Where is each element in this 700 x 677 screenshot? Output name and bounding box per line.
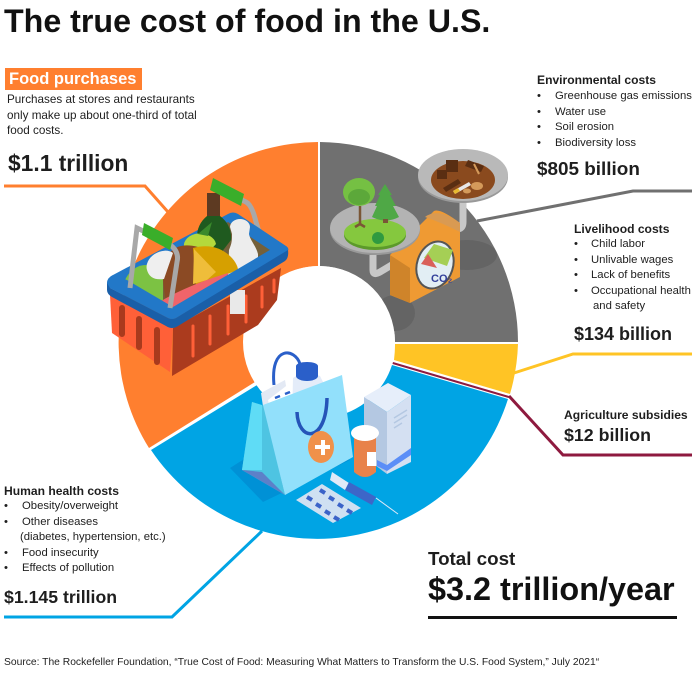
total underline (428, 616, 677, 619)
leader line: food purchases (4, 186, 168, 212)
panel: food purchases (5, 68, 197, 176)
leader line: human health costs (4, 531, 262, 617)
panel: total cost (428, 548, 675, 607)
value: agriculture subsidies: $12 billion (564, 425, 651, 445)
list: livelihood costs: • (574, 254, 578, 266)
icon: CO2 scale with tree and deforestation plates: CO₂ (431, 273, 452, 285)
list: livelihood costs: and safety (593, 300, 645, 312)
panel: livelihood costs (574, 222, 691, 344)
list: environmental costs: • (537, 136, 541, 148)
value: environmental costs: $805 billion (537, 159, 640, 180)
list: environmental costs: • (537, 121, 541, 133)
text: food purchases description: Purchases at stores and restaurants (7, 93, 195, 106)
donut segment: human health costs (151, 365, 508, 539)
list: livelihood costs: Lack of benefits (591, 269, 670, 281)
value: total cost: $3.2 trillion/year (428, 571, 675, 607)
icon: shopping basket (107, 178, 288, 376)
panel: human health costs (4, 484, 166, 607)
list: human health costs: Other diseases (22, 516, 98, 528)
list: human health costs (4, 500, 166, 574)
list: livelihood costs: Child labor (591, 238, 645, 250)
leader line: livelihood costs (514, 354, 692, 373)
list: livelihood costs (574, 238, 691, 312)
heading: environmental costs: Environmental costs (537, 73, 656, 87)
icon: CO2 scale with tree and deforestation plates (243, 149, 508, 418)
heading: agriculture subsidies: Agriculture subsidies (564, 408, 688, 422)
list: livelihood costs: • (574, 238, 578, 250)
icon: medical bag, medicine box, bottle and syringe (230, 353, 411, 523)
value: food purchases: $1.1 trillion (8, 150, 128, 176)
text: food purchases description: food costs. (7, 124, 64, 137)
value: human health costs: $1.145 trillion (4, 587, 117, 607)
panel: agriculture subsidies (564, 408, 688, 445)
list: environmental costs: • (537, 106, 541, 118)
heading: total cost: Total cost (428, 548, 515, 569)
list: livelihood costs: Occupational health (591, 284, 691, 296)
source note: Source: The Rockefeller Foundation, “True Cost of Food: Measuring What Matters to Transform the U.S. Food System,” July 2021“ (4, 657, 599, 668)
donut segment: livelihood costs (394, 344, 518, 394)
list: livelihood costs: Unlivable wages (591, 254, 673, 266)
donut segment: food purchases (119, 142, 318, 448)
heading: human health costs: Human health costs (4, 484, 119, 498)
list: environmental costs: Water use (555, 106, 606, 118)
value: livelihood costs: $134 billion (574, 324, 672, 344)
leader line: environmental costs (477, 191, 692, 221)
list: environmental costs: Greenhouse gas emissions (555, 90, 692, 102)
list: environmental costs: Biodiversity loss (555, 136, 636, 148)
list: environmental costs: Soil erosion (555, 121, 614, 133)
list: human health costs: • (4, 562, 8, 574)
list: livelihood costs: • (574, 284, 578, 296)
list: human health costs: Effects of pollution (22, 562, 114, 574)
list: human health costs: • (4, 516, 8, 528)
leader line: agriculture subsidies (509, 396, 692, 455)
list: livelihood costs: • (574, 269, 578, 281)
list: human health costs: • (4, 500, 8, 512)
list: environmental costs (537, 90, 692, 148)
list: human health costs: Obesity/overweight (22, 500, 118, 512)
text: food purchases description: only make up about one-third of total (7, 108, 197, 122)
list: human health costs: (diabetes, hypertension, etc.) (20, 531, 166, 543)
heading: livelihood costs: Livelihood costs (574, 222, 669, 236)
title: The true cost of food in the U.S. (4, 3, 490, 39)
list: human health costs: • (4, 546, 8, 558)
list: environmental costs: • (537, 90, 541, 102)
donut segment: agriculture subsidies (392, 362, 509, 398)
donut segment: environmental costs (320, 142, 518, 342)
list: human health costs: Food insecurity (22, 546, 99, 558)
text: food purchases description (7, 93, 197, 137)
heading: food purchases: Food purchases (9, 70, 136, 88)
panel: environmental costs (537, 73, 692, 180)
